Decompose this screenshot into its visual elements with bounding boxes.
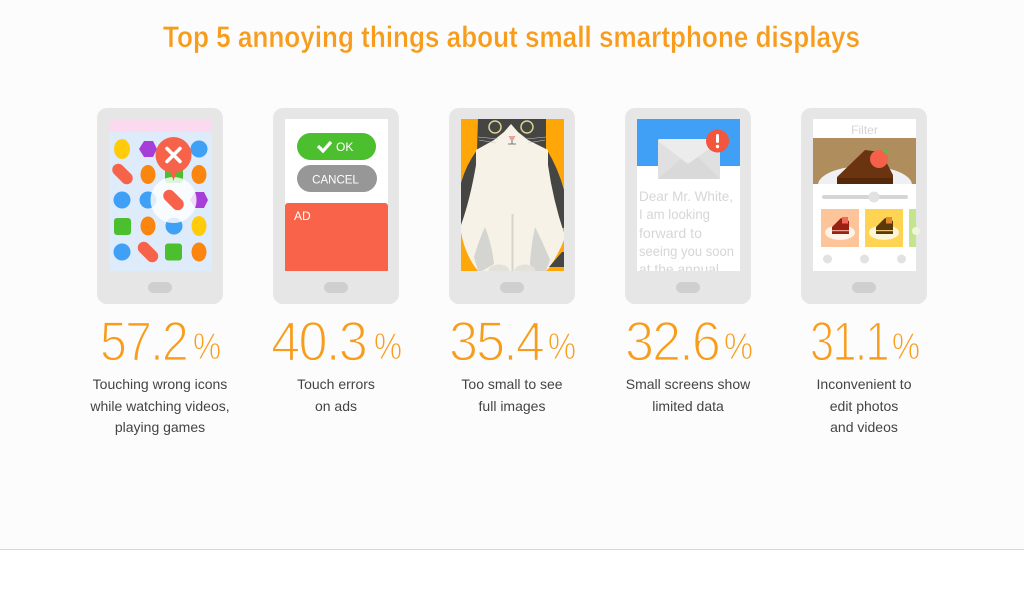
panel: limited data [625, 108, 753, 414]
description: and videos [830, 419, 898, 435]
icon: phone with ad: OK [336, 140, 353, 154]
stat: 40.3%: % [374, 326, 402, 367]
stat: 57.2%: % [193, 326, 221, 367]
description: limited data [652, 398, 724, 414]
description: on ads [315, 398, 357, 414]
description: Too small to see [461, 376, 563, 392]
description: Inconvenient to [817, 376, 912, 392]
icon: phone with email: Dear Mr. White, [639, 188, 733, 204]
stat: 31.1%: 31.1 [810, 310, 888, 372]
description: Touch errors [297, 376, 375, 392]
description: full images [479, 398, 545, 414]
title: Top 5 annoying things about small smartphone displays [163, 21, 860, 54]
icon: phone with email: I am looking [639, 206, 710, 222]
icon: phone with ad [273, 108, 399, 304]
icon: phone with email: seeing you soon [639, 243, 734, 259]
stat: 35.4%: 35.4 [449, 310, 544, 372]
icon: phone with email: forward to [639, 225, 702, 241]
icon: phone with email: at the annual [639, 261, 719, 277]
icon: phone with ad: AD [294, 209, 311, 223]
icon: phone with ad: CANCEL [312, 174, 359, 186]
stat: 57.2%: 57.2 [100, 310, 187, 372]
description: Small screens show [626, 376, 751, 392]
panel: edit photos [801, 108, 927, 435]
stat: 40.3%: 40.3 [271, 310, 366, 372]
stat: 35.4%: % [548, 326, 576, 367]
stat: 32.6%: 32.6 [625, 310, 719, 372]
icon: phone with photo filter: Filter [851, 123, 878, 137]
description: Touching wrong icons [93, 376, 227, 392]
icon: phone with photo filter [801, 108, 927, 304]
description: playing games [115, 419, 205, 435]
icon: phone with cat [449, 108, 575, 304]
panel: touch errors on ads [271, 108, 402, 414]
description: edit photos [830, 398, 898, 414]
description: while watching videos, [89, 398, 230, 414]
stat: 31.1%: % [892, 326, 920, 367]
stat: 32.6%: % [724, 326, 753, 367]
icon: phone with email [625, 108, 751, 304]
icon: phone with game [97, 108, 223, 304]
panel: too small images [449, 108, 576, 414]
panel: wrong icons [89, 108, 230, 435]
